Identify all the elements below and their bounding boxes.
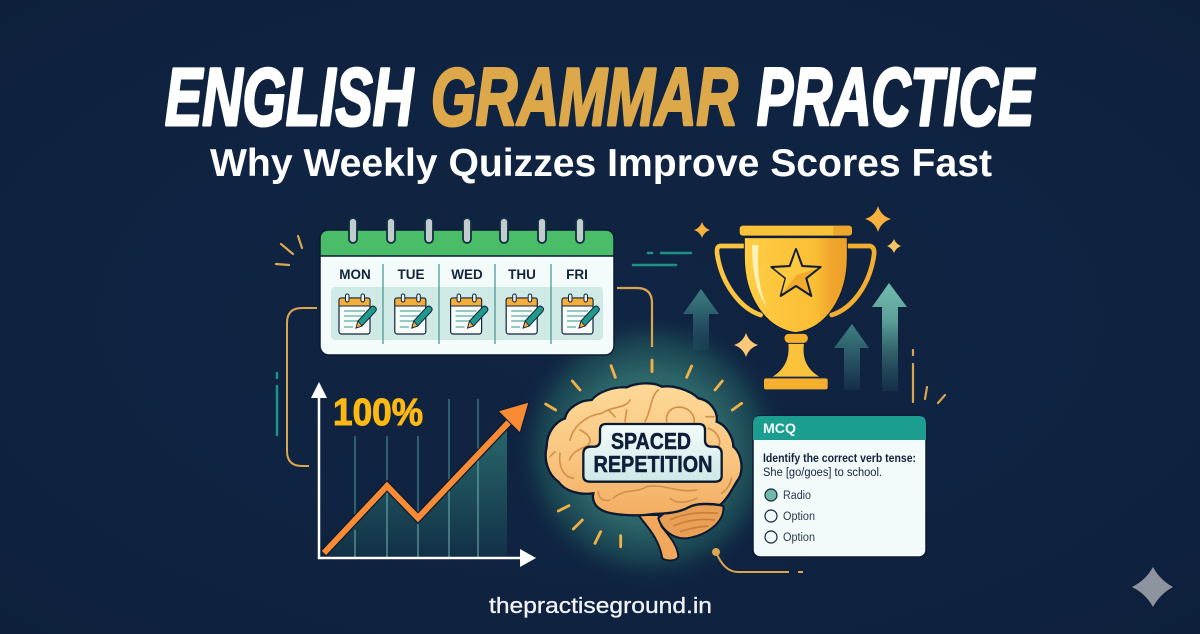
sparkle small left — [694, 222, 710, 238]
title word: English: ENGLISH — [165, 52, 414, 143]
spaced repetition plaque — [583, 424, 722, 482]
trophy rim — [739, 225, 852, 236]
trophy base — [764, 378, 828, 389]
weekday labels — [339, 267, 588, 282]
cerebellum — [658, 504, 723, 538]
footer url: thepractiseground.in — [489, 593, 712, 618]
binding rings — [349, 218, 584, 243]
quiz card — [753, 416, 926, 557]
radio selected — [765, 489, 777, 501]
title — [165, 52, 1036, 143]
accent lines — [277, 253, 691, 435]
brain cerebrum — [546, 383, 741, 515]
arrow middle — [834, 324, 869, 390]
arrow right — [872, 283, 907, 391]
question: Identify the correct verb tense: — [763, 453, 916, 465]
radio labels — [783, 490, 815, 544]
weekday labels: MON — [339, 267, 371, 282]
day dividers — [383, 264, 551, 344]
trophy — [717, 225, 874, 389]
trend line stroke — [324, 421, 510, 553]
line chart — [311, 382, 536, 567]
calendar body — [320, 230, 614, 355]
chart gridlines over area — [355, 460, 478, 557]
trophy cup — [744, 238, 847, 333]
star facet — [774, 251, 818, 294]
plaque text: repetition: REPETITION — [594, 451, 712, 477]
weekday labels: TUE — [398, 267, 424, 282]
title word: Grammar: GRAMMAR — [431, 52, 738, 143]
weekday labels: THU — [508, 267, 536, 282]
brain folds — [550, 390, 732, 502]
radio option three — [765, 531, 777, 543]
sparkle small right — [887, 239, 901, 253]
sparks: calendar — [276, 236, 302, 265]
connector: calendar to chart — [287, 308, 317, 466]
arrow left — [683, 289, 719, 350]
trophy stem — [773, 343, 819, 377]
calendar — [320, 218, 614, 355]
connector: calendar to brain — [617, 288, 652, 372]
plaque text: spaced: SPACED — [611, 428, 691, 454]
sparks: trophy right — [913, 350, 945, 403]
icon: quiz note Wednesday — [451, 294, 488, 334]
icon: quiz note Monday — [339, 294, 376, 334]
weekday labels: WED — [451, 267, 483, 282]
connector: quiz to brain — [713, 549, 803, 572]
radio labels: Radio — [783, 490, 811, 502]
question sentence: She [go/goes] to school. — [763, 467, 882, 479]
weekday strip — [331, 287, 603, 340]
trend line — [324, 421, 510, 553]
icon: quiz note Friday — [562, 294, 599, 334]
sparkle below — [734, 333, 758, 357]
trophy handles — [717, 246, 874, 315]
y axis — [319, 398, 520, 558]
brain — [546, 360, 742, 560]
brain glow — [512, 312, 788, 588]
card header — [753, 416, 926, 440]
icon: corner sparkle — [1132, 567, 1173, 607]
x axis arrowhead — [520, 549, 536, 567]
icon: quiz note Thursday — [506, 294, 544, 334]
y axis arrowhead — [311, 382, 327, 398]
trend arrowhead — [498, 402, 529, 433]
cup highlight — [752, 245, 767, 307]
radio option two — [765, 510, 777, 522]
sparkles — [694, 206, 901, 357]
trophy star — [771, 249, 821, 296]
chart gridlines — [355, 399, 478, 557]
title word: Practice: PRACTICE — [757, 52, 1036, 143]
radio labels: Option — [783, 532, 815, 544]
chart area fill — [325, 430, 507, 556]
card body — [753, 416, 926, 557]
trophy knob — [784, 333, 808, 343]
icon: quiz note Tuesday — [395, 294, 432, 334]
sparkle large — [865, 206, 891, 232]
card title: MCQ — [763, 420, 796, 436]
subtitle: Why Weekly Quizzes Improve Scores Fast — [210, 142, 992, 185]
brain rays — [546, 360, 742, 547]
trophy arrows — [683, 283, 907, 391]
calendar header — [320, 230, 614, 256]
brain stem — [638, 515, 678, 560]
weekday labels: FRI — [566, 267, 588, 282]
rim shade — [833, 226, 852, 235]
100% label: 100% — [333, 392, 423, 434]
radio labels: Option — [783, 511, 815, 523]
